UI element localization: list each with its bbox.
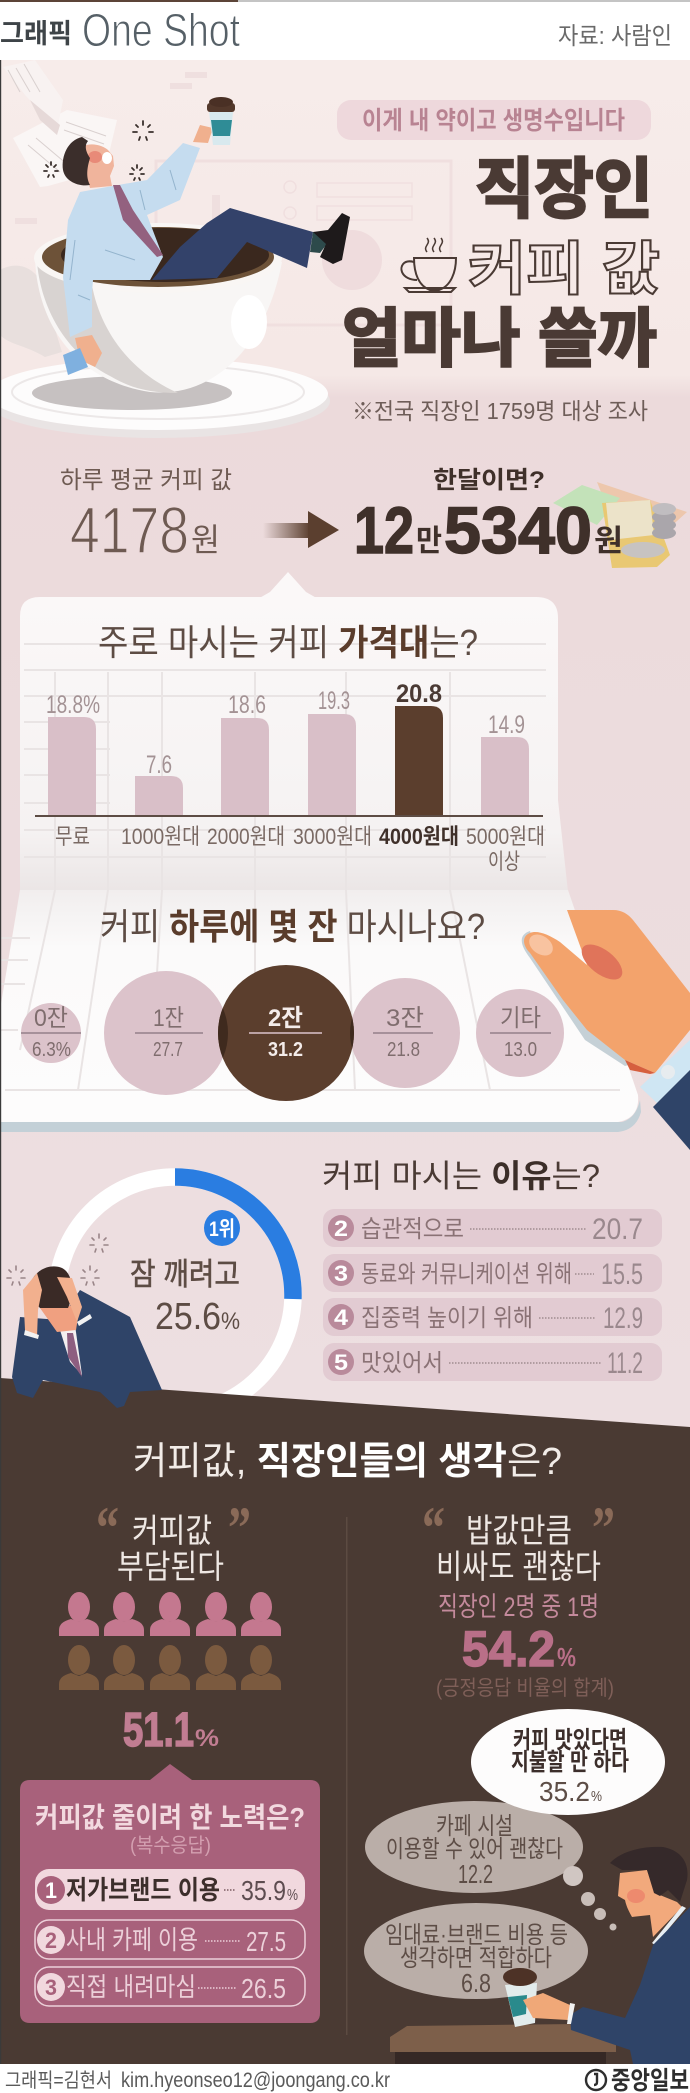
reason 4: 4 xyxy=(334,1305,349,1330)
reason 2: 2 xyxy=(334,1216,348,1241)
bar chart: price range xyxy=(35,680,545,874)
suit sleeve xyxy=(653,1070,690,1150)
column divider xyxy=(346,1517,348,2035)
header xyxy=(0,0,690,56)
effort 3: 직접 내려마심 xyxy=(66,1972,196,2002)
bar: 4000 won highlighted: 4000원대 xyxy=(379,824,459,849)
left edge line xyxy=(0,60,1,2064)
thumbnail xyxy=(525,930,557,960)
value: 25.6% xyxy=(155,1296,240,1338)
reason 3: 3 xyxy=(334,1261,348,1286)
bar: 5000 won and over: 5000원대 xyxy=(466,824,545,849)
survey note: ※전국 직장인 1759명 대상 조사 xyxy=(352,398,648,424)
effort 1: 저가브랜드 이용 xyxy=(66,1875,220,1905)
speech bubble 1: % xyxy=(591,1788,602,1805)
pictogram: pink row xyxy=(59,1592,281,1636)
bubble: 0 cups: 6.3% xyxy=(32,1039,71,1061)
list: reasons 2 to 5 xyxy=(323,1209,662,1381)
effort 1: 1 xyxy=(45,1878,57,1903)
bar: 5000 won and over: 이상 xyxy=(488,849,520,874)
reason 2: 20.7 xyxy=(592,1213,643,1246)
raised hand xyxy=(193,125,213,143)
bar: 1000 won xyxy=(121,751,200,849)
bubble: 0 cups: 0잔 xyxy=(34,1005,68,1032)
lower hand xyxy=(75,335,102,367)
quote marks: “ xyxy=(96,1495,119,1561)
cup body xyxy=(35,258,282,393)
shirt folds xyxy=(70,170,176,300)
bubble: 0 cups xyxy=(21,1003,81,1063)
reason 4 xyxy=(323,1298,662,1336)
takeaway cup xyxy=(503,1968,537,2027)
table xyxy=(390,2024,616,2064)
email: kim.hyeonseo12@joongang.co.kr xyxy=(121,2069,390,2092)
stat: daily average: 4178 xyxy=(70,493,189,567)
quote marks xyxy=(96,1495,251,1561)
reason 5 xyxy=(323,1343,662,1381)
quote marks: “ xyxy=(422,1495,445,1561)
pants xyxy=(152,208,313,280)
spark: right xyxy=(130,165,144,180)
bar: 5000 won and over: 14.9 xyxy=(488,711,525,739)
cup handle highlight xyxy=(231,295,267,349)
bar: 5000 won and over xyxy=(466,711,545,874)
quote marks: ” xyxy=(228,1495,251,1561)
bar: 3000 won xyxy=(293,687,372,849)
label: 잠 깨려고 xyxy=(130,1257,240,1292)
value 54.2 percent: 54.2 xyxy=(462,1621,555,1677)
bubble: 1 cup: 27.7 xyxy=(153,1039,183,1061)
card xyxy=(63,348,88,375)
heading: workers' opinion: 커피값, 직장인들의 생각은? xyxy=(133,1441,562,1483)
reason 4: 집중력 높이기 위해 xyxy=(361,1305,533,1332)
reason 5: 5 xyxy=(334,1350,348,1375)
socks and shoes xyxy=(310,213,350,264)
notebook panel xyxy=(0,597,641,1132)
right column: acceptable: 비싸도 괜찮다 xyxy=(436,1548,601,1585)
effort 3: 3 xyxy=(45,1975,57,2000)
thought dots xyxy=(563,1866,616,1930)
takeaway cup xyxy=(207,97,235,145)
cup handle shadow xyxy=(0,266,62,357)
bar: 4000 won highlighted xyxy=(379,680,459,849)
notebook lower page xyxy=(0,890,638,1122)
bubble: 1 cup xyxy=(104,971,228,1095)
icon: steaming coffee cup xyxy=(401,238,456,292)
bar: 1000 won: 7.6 xyxy=(146,751,172,779)
cup body shadow xyxy=(37,262,178,393)
donut chart: top reason xyxy=(7,1177,293,1413)
header label: One Shot: One Shot xyxy=(82,4,240,56)
notebook pointer xyxy=(256,572,320,600)
hand xyxy=(523,1993,570,2020)
speech bubble 1: 35.2 xyxy=(539,1776,590,1807)
illustration: banknotes and coins xyxy=(553,482,687,568)
panel note: (복수응답) xyxy=(130,1834,211,1857)
tie xyxy=(113,185,163,257)
quote marks xyxy=(422,1495,615,1561)
reason 3: 동료와 커뮤니케이션 위해 xyxy=(361,1261,572,1288)
stat: daily average: 원 xyxy=(191,522,220,558)
coffee xyxy=(42,227,274,287)
header label: graphic: 그래픽 xyxy=(0,19,72,49)
palm shadow xyxy=(576,938,628,986)
title line 2 outlined: 커피 값 xyxy=(468,237,660,302)
panel heading: 커피값 줄이려 한 노력은? xyxy=(35,1802,305,1833)
thought bubble 2 xyxy=(365,1801,583,1893)
bar: 3000 won: 19.3 xyxy=(318,687,350,715)
source: 자료: 사람인 xyxy=(558,23,672,50)
flying papers xyxy=(3,60,117,187)
effort 2: 2 xyxy=(45,1928,57,1953)
effort 2 xyxy=(35,1920,305,1959)
reason 2: 습관적으로 xyxy=(361,1216,464,1243)
thought bubble 3: 임대료·브랜드 비용 등 xyxy=(385,1922,568,1949)
background decor: faint chart window xyxy=(15,72,451,325)
saucer xyxy=(0,358,330,438)
bubble: 3 cups: 21.8 xyxy=(387,1039,420,1061)
bubble: other xyxy=(476,989,564,1077)
reason 2 xyxy=(323,1209,662,1247)
stat: daily average xyxy=(60,467,232,567)
bar: 2000 won: 2000원대 xyxy=(207,824,285,849)
credit: 그래픽=김현서 xyxy=(5,2069,112,2092)
bar: 1000 won: 1000원대 xyxy=(121,824,200,849)
heading: reasons: 커피 마시는 이유는? xyxy=(322,1158,600,1194)
cup rim xyxy=(34,223,282,281)
bar: 2000 won: 18.6 xyxy=(228,691,266,719)
stat: monthly total: 한달이면? xyxy=(433,467,545,494)
stat: monthly total: 12 xyxy=(354,493,414,567)
arrow xyxy=(263,511,339,548)
neck and face xyxy=(84,144,114,188)
right column: acceptable xyxy=(422,1495,615,1700)
axis xyxy=(35,815,543,817)
heading: 커피값 xyxy=(132,1512,212,1549)
effort 2: 27.5 xyxy=(246,1926,286,1957)
tagline pill xyxy=(337,100,651,140)
collar xyxy=(652,1906,686,1945)
bubble: other: 13.0 xyxy=(504,1039,537,1061)
bar: free: 18.8% xyxy=(46,691,100,719)
value 51.1 percent: 51.1 xyxy=(123,1704,194,1757)
stat: monthly total: 만 xyxy=(416,525,442,558)
note: (긍정응답 비율의 합계) xyxy=(436,1677,614,1700)
bubble chart: cups per day xyxy=(21,965,564,1101)
pictogram: brown row xyxy=(59,1645,281,1690)
bubble: 3 cups xyxy=(350,978,460,1088)
shirt cuff xyxy=(640,1040,690,1103)
bubble: 3 cups: 3잔 xyxy=(386,1005,424,1032)
left column: burdened xyxy=(59,1495,281,1757)
main title xyxy=(342,152,660,375)
left column: burdened: 부담된다 xyxy=(117,1548,224,1585)
arc: 25.6 percent xyxy=(175,1177,293,1299)
thought bubble 3: 6.8 xyxy=(461,1968,491,1998)
badge: rank 1: 1위 xyxy=(209,1218,235,1241)
shirt xyxy=(63,143,200,337)
stat: monthly total: 5340 xyxy=(444,493,592,567)
footer xyxy=(5,2067,689,2093)
heading: 밥값만큼 xyxy=(466,1512,572,1549)
effort 1: 35.9 xyxy=(241,1875,286,1906)
blush and smile xyxy=(88,151,112,164)
effort 3: 26.5 xyxy=(241,1973,286,2004)
tagline pill: 이게 내 약이고 생명수입니다 xyxy=(362,107,625,135)
sparks xyxy=(7,1234,108,1285)
section background: pink xyxy=(0,60,690,1430)
thought bubble 3 xyxy=(364,1903,588,1999)
quote marks: ” xyxy=(592,1495,615,1561)
stat: monthly total xyxy=(354,467,623,567)
thought bubble 2: 12.2 xyxy=(458,1859,493,1889)
bar: 4000 won highlighted: 20.8 xyxy=(396,680,442,708)
reason 3 xyxy=(323,1254,662,1292)
reason 5: 맛있어서 xyxy=(361,1350,443,1377)
stat: monthly total: 원 xyxy=(594,525,623,558)
reason 5: 11.2 xyxy=(607,1347,643,1380)
value 51.1 percent: % xyxy=(195,1725,219,1752)
dark section background xyxy=(0,1378,690,2064)
stat: daily average: 하루 평균 커피 값 xyxy=(60,467,232,494)
reason 4: 12.9 xyxy=(603,1302,643,1335)
thought bubble 2: 이용할 수 있어 괜찮다 xyxy=(386,1836,563,1863)
speech bubble 1: 커피 맛있다면 xyxy=(513,1727,627,1754)
bar: 3000 won: 3000원대 xyxy=(293,824,372,849)
notebook upper page xyxy=(20,597,568,892)
logo mark xyxy=(586,2070,606,2090)
title line 1: 직장인 xyxy=(475,152,653,226)
thought bubble 2: 카페 시설 xyxy=(436,1813,513,1840)
bubble: other: 기타 xyxy=(500,1005,541,1032)
bubble: 2 cups highlighted xyxy=(218,965,354,1101)
badge: rank 1 xyxy=(204,1210,240,1246)
effort 1: % xyxy=(287,1887,298,1904)
notebook lower edge xyxy=(0,1100,641,1132)
effort 1 xyxy=(35,1869,305,1910)
reason 3: 15.5 xyxy=(601,1258,643,1291)
illustration: office worker lying in coffee cup xyxy=(0,60,350,438)
illustration: thinking worker xyxy=(503,1847,690,2064)
hair xyxy=(63,137,90,185)
effort 2: 사내 카페 이용 xyxy=(66,1925,198,1955)
illustration: stressed worker holding head xyxy=(12,1266,162,1408)
speech bubble 1: 지불할 만 하다 xyxy=(511,1749,629,1776)
hair xyxy=(610,1847,688,1902)
illustration: hand holding notebook xyxy=(522,910,690,1150)
thought bubble 3: 생각하면 적합하다 xyxy=(400,1945,552,1972)
effort 3 xyxy=(35,1967,305,2006)
subheading: 직장인 2명 중 1명 xyxy=(438,1592,599,1622)
title line 3: 얼마나 쓸까 xyxy=(342,303,657,375)
value 54.2 percent: % xyxy=(557,1642,576,1672)
speech bubble 1 xyxy=(471,1709,665,1815)
suit xyxy=(570,1907,690,2064)
bubble: 2 cups highlighted: 31.2 xyxy=(268,1039,303,1061)
bar: free xyxy=(46,691,100,849)
bubble: 1 cup: 1잔 xyxy=(153,1005,184,1032)
bubble: 2 cups highlighted: 2잔 xyxy=(268,1005,303,1032)
spark: left xyxy=(44,162,58,177)
face xyxy=(618,1870,682,1937)
heading: cups per day: 커피 하루에 몇 잔 마시나요? xyxy=(100,906,485,947)
bar: 2000 won xyxy=(207,691,285,849)
bar: free: 무료 xyxy=(55,824,90,849)
spark: top xyxy=(133,121,153,140)
heading: price range: 주로 마시는 커피 가격대는? xyxy=(98,622,478,663)
panel: efforts to cut coffee spending xyxy=(20,1764,320,2023)
